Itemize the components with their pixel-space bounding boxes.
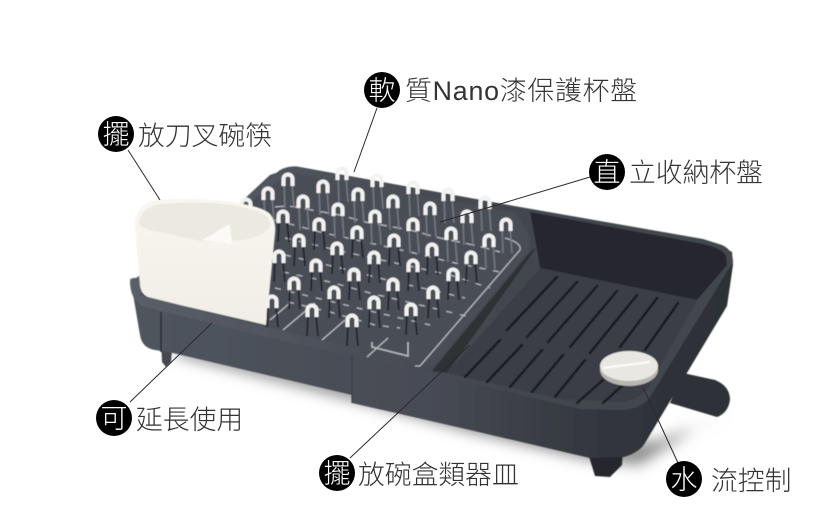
- label: extendable: 延長使用: [136, 405, 243, 435]
- tray shadow: [175, 345, 730, 465]
- label: upright storage: 立收納杯盤: [629, 158, 763, 188]
- label: cutlery: 擺: [102, 120, 130, 150]
- leader lines: [128, 108, 678, 463]
- label: water flow: 流控制: [711, 466, 791, 496]
- label: extendable: [96, 400, 243, 436]
- tray right foot: [587, 450, 623, 477]
- label: bowls: 放碗盒類器皿: [358, 460, 519, 490]
- label: water flow: 水: [670, 465, 698, 495]
- label: bowls: 擺: [324, 459, 350, 489]
- leg mark: [160, 312, 162, 352]
- label: cutlery: [98, 116, 272, 152]
- caddy opening: [139, 202, 270, 242]
- label: bowls: [319, 455, 519, 491]
- label: extendable: 可: [100, 404, 128, 434]
- drain spout: [670, 373, 730, 417]
- label: nano coating: 質Nano漆保護杯盤: [405, 76, 637, 106]
- drainer floor: [447, 268, 697, 402]
- dish rack product: [130, 166, 733, 477]
- drainer ribs: [465, 277, 678, 403]
- caddy divider: [202, 225, 232, 244]
- front peg: [267, 296, 278, 327]
- tray rim surface: [130, 166, 733, 410]
- label: upright storage: [589, 154, 763, 190]
- cutlery caddy: [135, 199, 275, 325]
- rack floor: [140, 174, 530, 366]
- tray outer body: [130, 168, 733, 458]
- rack wires: [270, 206, 520, 366]
- label: nano coating: 軟: [368, 76, 396, 106]
- peg rows: [242, 168, 512, 346]
- drainer divider: [432, 247, 537, 373]
- label: cutlery: 放刀叉碗筷: [138, 121, 272, 151]
- extension seam: [351, 355, 353, 403]
- label: upright storage: 直: [594, 158, 620, 188]
- tray left foot: [161, 340, 173, 367]
- drain plug: [600, 351, 658, 386]
- drainer back wall: [530, 212, 727, 300]
- label: water flow: [666, 461, 791, 497]
